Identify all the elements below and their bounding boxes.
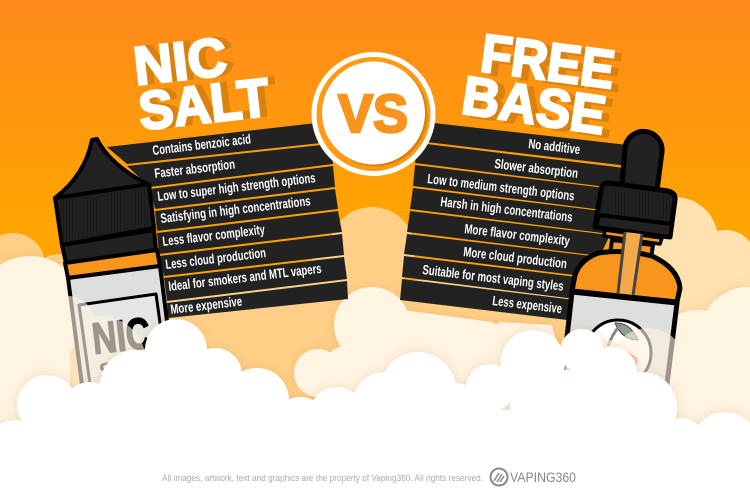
table: nic salt: Satisfying in high concentrations <box>160 193 311 226</box>
clouds: white front layer <box>0 319 750 500</box>
translucent cloud over bottles <box>42 296 686 431</box>
bottle: nic salt: NIC <box>90 309 153 364</box>
vs badge: VS <box>338 84 408 144</box>
table: nic salt: More expensive <box>170 294 243 317</box>
bottle: nic salt: SALT <box>98 352 161 386</box>
bottle: nic salt <box>55 139 172 420</box>
title: nic salt: SALT <box>136 67 273 142</box>
title: free base: BASE <box>465 69 617 149</box>
table: free base: No additive <box>528 136 581 157</box>
title: free base: FREE <box>477 23 618 100</box>
vs badge <box>312 52 436 176</box>
table: free base: Suitable for most vaping styles <box>422 262 564 294</box>
table: nic salt: Less flavor complexity <box>162 222 266 249</box>
table: nic salt: Low to super high strength options <box>157 170 316 204</box>
footer <box>162 468 576 486</box>
title: nic salt: NIC <box>131 27 230 97</box>
icon: vaping360 logo <box>490 468 508 486</box>
footer: All images, artwork, text and graphics are the property of Vaping360. All rights reserved. <box>162 473 483 484</box>
table: nic salt: Ideal for smokers and MTL vapers <box>168 261 322 294</box>
table: nic salt: Less cloud production <box>165 245 267 272</box>
table: nic salt: Contains benzoic acid <box>152 131 252 158</box>
table: free base: More flavor complexity <box>464 221 571 249</box>
table: free base: Less expensive <box>492 293 563 316</box>
clouds: right peach layer <box>632 197 750 378</box>
clouds: pale middle layer <box>0 256 750 445</box>
title: nic salt: SALT <box>143 66 280 141</box>
title: free base: FREE <box>484 26 625 103</box>
title: nic salt <box>131 26 280 142</box>
footer: VAPING360 <box>510 470 576 485</box>
table: free base: Harsh in high concentrations <box>440 194 573 225</box>
title: free base: BASE <box>458 66 610 146</box>
bottle: free base <box>560 131 680 400</box>
table: nic salt: Faster absorption <box>154 156 236 181</box>
clouds: back orange layer <box>0 207 600 430</box>
table: free base: Slower absorption <box>494 156 579 181</box>
table: free base: More cloud production <box>463 244 568 271</box>
table: free base: Low to medium strength options <box>427 171 575 204</box>
table: nic salt <box>107 122 348 318</box>
table: free base <box>400 122 628 320</box>
title: nic salt: NIC <box>138 26 237 96</box>
title: free base <box>458 23 625 149</box>
